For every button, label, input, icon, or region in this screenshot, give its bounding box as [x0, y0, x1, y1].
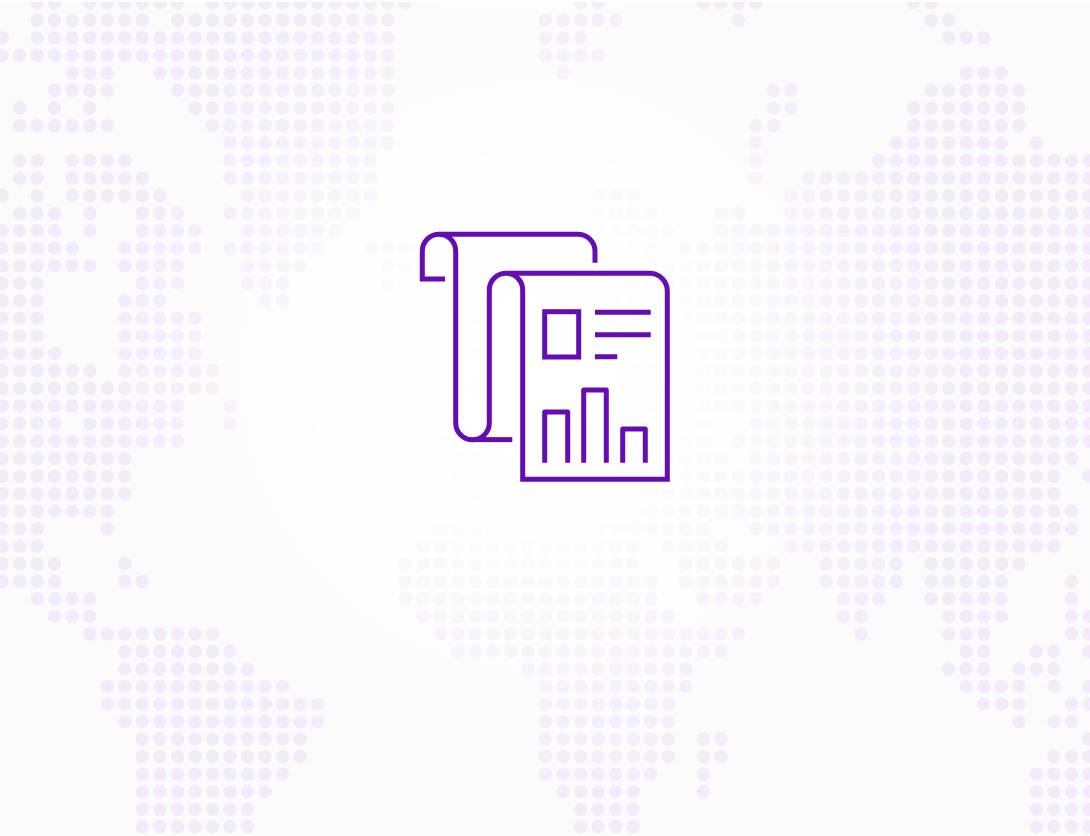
image placeholder	[545, 312, 579, 357]
bar chart	[545, 390, 645, 463]
icon: report document with scroll and charts	[422, 234, 667, 479]
back sheet top edge	[439, 234, 595, 263]
back sheet bottom tail	[473, 437, 512, 442]
text lines	[595, 312, 651, 357]
top edge strip	[0, 0, 1090, 2]
back sheet curl and body	[422, 234, 667, 479]
